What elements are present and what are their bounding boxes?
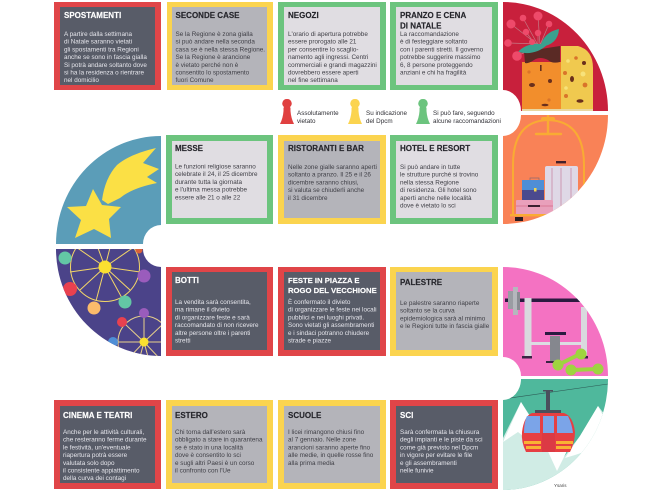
panel: spostamenti — [54, 2, 161, 90]
text: sci: degli impianti e le piste da sci — [400, 437, 483, 444]
text: messe: e l'ultima messa potrebbe — [175, 187, 248, 194]
text: botti: raccomandato di non ricevere — [175, 322, 259, 329]
text: botti: di organizzare feste e sarà — [175, 314, 250, 321]
text: feste in piazza: strade e piazze — [288, 338, 331, 344]
panel: negozi — [278, 2, 386, 90]
legend text: green: alcune raccomandazioni — [433, 118, 501, 125]
legend text: yellow: del Dpcm — [366, 118, 393, 125]
text: spostamenti: di Natale saranno vietati — [64, 39, 132, 46]
text: spostamenti: nel domicilio — [64, 77, 99, 84]
text: negozi: nel fine settimana — [288, 77, 338, 84]
text: scuole: alle medie, in quelle rosse fino — [288, 452, 374, 459]
text: pranzo e cena: La raccomandazione — [400, 31, 459, 38]
heading: scuole: SCUOLE — [288, 411, 322, 420]
text: feste in piazza: di organizzare le feste nei locali — [288, 307, 377, 314]
text: cinema e teatri: valutata solo dopo — [63, 460, 115, 467]
heading: botti: BOTTI — [175, 276, 199, 285]
text: scuole: alla prima media — [288, 460, 335, 467]
text: scuole: I licei rimangono chiusi fino — [288, 429, 365, 436]
panel: ristoranti e bar — [278, 135, 386, 224]
heading: cinema e teatri: CINEMA E TEATRI — [63, 411, 132, 420]
icon: red pawn — [280, 99, 294, 124]
text: sci: Sarà confermata la chiusura — [400, 429, 480, 436]
text: cinema e teatri: le festività, un'eventuale — [63, 444, 131, 451]
text: ristoranti e bar: soltanto a pranzo. Il 25 e il 26 — [288, 172, 371, 179]
text: estero: il confronto con l'Ue — [175, 468, 231, 474]
text: pranzo e cena: anziani e chi ha fragilità — [400, 70, 467, 76]
heading: palestre: PALESTRE — [400, 278, 443, 287]
text: ristoranti e bar: dicembre saranno chiusi, — [288, 179, 359, 186]
text: spostamenti: anche se sono in fascia gialla — [64, 54, 147, 61]
heading: sci: SCI — [400, 411, 413, 420]
text: spostamenti: A partire dalla settimana — [64, 31, 133, 38]
panel: seconde case — [167, 2, 273, 90]
text: scuole: arancioni saranno aperte fino — [288, 444, 371, 451]
text: hotel e resort: nella stessa Regione — [400, 179, 459, 186]
text: cinema e teatri: il consistente appiattimento — [63, 468, 140, 474]
text: botti: ma rimane il divieto — [175, 307, 230, 314]
text: ristoranti e bar: il 31 dicembre — [288, 195, 328, 202]
heading: estero: ESTERO — [175, 411, 208, 420]
heading: feste in piazza: ROGO DEL VECCHIONE — [288, 286, 377, 295]
text: seconde case: casa se è nella stessa Regione. — [176, 46, 265, 53]
text: seconde case: fuori Comune — [176, 77, 214, 84]
illustration: ferris wheels — [56, 249, 161, 356]
illustration: panettone — [503, 2, 608, 111]
text: estero: obbligato a stare in quarantena — [175, 437, 263, 444]
legend — [280, 99, 501, 125]
text: pranzo e cena: 6, 8 persone proteggendo — [400, 62, 473, 69]
text: palestre: epidemiologica sarà al minimo — [400, 315, 486, 322]
text: seconde case: si può andare nella seconda — [176, 39, 255, 46]
text: negozi: per consentire lo scaglio- — [288, 46, 359, 53]
legend text: green: Si può fare, seguendo — [433, 110, 495, 117]
panel: cinema e teatri — [54, 400, 161, 489]
text: botti: stretti — [175, 338, 191, 344]
text: hotel e resort: aperti anche nelle località — [400, 195, 472, 202]
text: negozi: essere prorogato alle 21 — [288, 39, 357, 46]
text: ristoranti e bar: si valuta se chiuderli anche — [288, 187, 365, 194]
text: estero: dove è consentito lo sci — [175, 452, 241, 459]
text: estero: Chi torna dall'estero sarà — [175, 429, 246, 436]
text: cinema e teatri: della curva dei contagi — [63, 475, 126, 482]
panel: messe — [166, 135, 273, 224]
heading: pranzo e cena: DI NATALE — [400, 22, 442, 30]
panel: scuole — [278, 400, 386, 489]
heading: feste in piazza: FESTE IN PIAZZA E — [288, 276, 359, 285]
text: messe: celebrate il 24, il 25 dicembre — [175, 171, 258, 178]
text: negozi: L'orario di apertura potrebbe — [288, 31, 368, 38]
icon: green pawn — [416, 99, 430, 124]
text: feste in piazza: pubblici e nei luoghi privati. — [288, 314, 364, 321]
text: hotel e resort: Si può andare in tutte — [400, 164, 461, 171]
heading: spostamenti: SPOSTAMENTI — [64, 11, 121, 20]
text: seconde case: è vietato perché non è — [176, 62, 239, 69]
text: seconde case: consentito lo spostamento — [176, 70, 250, 76]
heading: pranzo e cena: PRANZO E CENA — [400, 11, 466, 20]
text: estero: e sugli altri Paesi è un corso — [175, 460, 255, 467]
text: feste in piazza: e i sindaci potranno chiudere — [288, 330, 370, 337]
panel: hotel e resort — [390, 135, 498, 224]
illustration: cable car — [503, 379, 608, 490]
text: negozi: dovrebbero essere aperti — [288, 70, 359, 76]
text: hotel e resort: dove è vietato lo sci — [400, 202, 456, 210]
text: hotel e resort: di residenza. Gli hotel sono — [400, 187, 477, 194]
text: cinema e teatri: che resteranno ferme durante — [63, 437, 147, 444]
illustration: gym bench — [503, 267, 608, 376]
legend text: yellow: Su indicazione — [366, 110, 407, 117]
panel: botti — [166, 267, 273, 356]
illustration: luggage cart — [503, 115, 608, 224]
text: sci: e gli assembramenti — [400, 460, 457, 467]
illustration: shooting star — [56, 136, 161, 244]
heading: hotel e resort: HOTEL E RESORT — [400, 144, 470, 153]
heading: ristoranti e bar: RISTORANTI E BAR — [288, 144, 364, 153]
text: feste in piazza: Sono vietati gli assembramenti — [288, 322, 374, 329]
text: pranzo e cena: potrebbe suggerire massimo — [400, 54, 481, 61]
legend text: red: vietato — [297, 118, 316, 125]
heading: messe: MESSE — [175, 144, 204, 153]
text: messe: essere alle 21 o alle 22 — [175, 194, 241, 201]
text: spostamenti: si ha la residenza o rientrare — [64, 70, 145, 76]
text: sci: nelle funivie — [400, 468, 434, 474]
credit: Ysaris — [554, 483, 567, 488]
text: cinema e teatri: Anche per le attività culturali, — [63, 429, 144, 436]
text: sci: come già previsto nel Dpcm — [400, 444, 478, 451]
panel: pranzo e cena — [390, 2, 498, 90]
panel: feste in piazza — [278, 267, 386, 356]
text: spostamenti: Si potrà andare soltanto dove — [64, 62, 147, 69]
panel: sci — [390, 400, 498, 489]
text: messe: durante tutta la giornata — [175, 179, 242, 186]
text: hotel e resort: le strutture purché si trovino — [400, 172, 479, 179]
text: feste in piazza: È confermato il divieto — [288, 297, 351, 306]
text: seconde case: Se la Regione è arancione — [176, 54, 251, 61]
text: estero: se è stato in una località — [175, 444, 244, 451]
legend text: red: Assolutamente — [297, 110, 339, 117]
panel: estero — [166, 400, 273, 489]
text: palestre: e le Regioni tutte in fascia gialle — [400, 323, 490, 330]
text: botti: altre persone oltre i parenti — [175, 330, 250, 337]
text: sci: in vigore per evitare le file — [400, 452, 473, 459]
text: scuole: al 7 gennaio. Nelle zone — [288, 437, 357, 444]
text: botti: La vendita sarà consentita, — [175, 299, 251, 306]
text: negozi: commerciali e grandi magazzini — [288, 62, 377, 69]
text: palestre: soltanto se la curva — [400, 308, 455, 315]
panel: palestre — [390, 267, 498, 356]
text: spostamenti: gli spostamenti tra Regioni — [64, 46, 139, 53]
text: palestre: Le palestre saranno riaperte — [400, 300, 480, 307]
heading: negozi: NEGOZI — [288, 11, 319, 20]
text: negozi: namento agli ingressi. Centri — [288, 54, 368, 61]
text: ristoranti e bar: Nelle zone gialle saranno aperti — [288, 164, 377, 171]
text: seconde case: Se la Regione è zona gialla — [176, 31, 253, 38]
icon: yellow pawn — [348, 99, 362, 124]
text: pranzo e cena: con i parenti stretti. Il governo — [400, 46, 484, 53]
text: messe: Le funzioni religiose saranno — [175, 164, 256, 170]
text: pranzo e cena: è di festeggiare soltanto — [400, 39, 468, 46]
heading: seconde case: SECONDE CASE — [176, 11, 240, 20]
text: cinema e teatri: riapertura potrà essere — [63, 452, 128, 459]
